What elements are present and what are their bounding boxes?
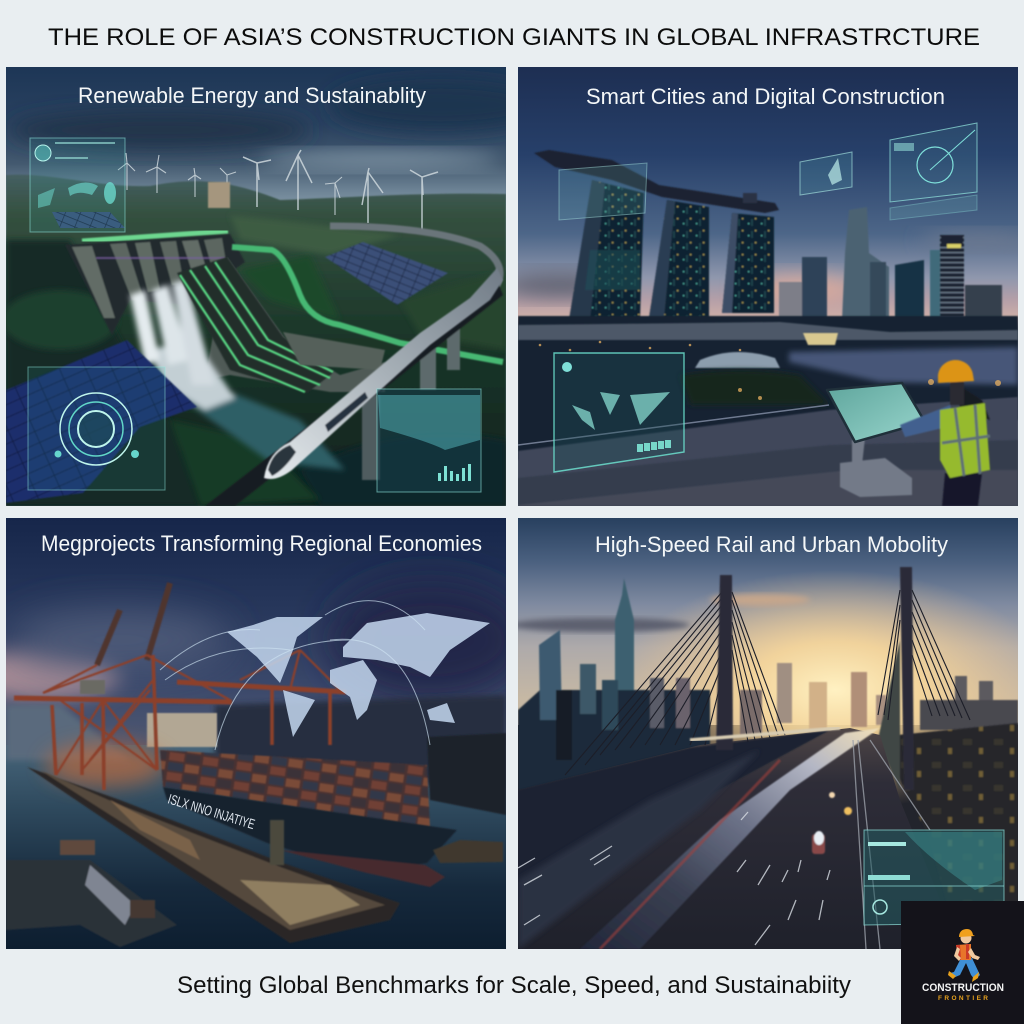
HUD: world map panel [554,353,684,472]
right yard [427,733,506,815]
dam green energy line [82,231,228,241]
heading: renewable energy: Renewable Energy and Sustainablity [78,83,426,108]
worker [900,360,990,506]
heading: megaprojects: Megprojects Transforming Regional Economies [41,531,482,556]
viaduct [205,226,503,506]
blurred train streak [580,728,880,949]
world map overlay [227,613,490,737]
heading: high-speed rail: High-Speed Rail and Urban Mobolity [595,532,948,557]
water base [6,745,506,949]
heading: smart cities: Smart Cities and Digital Construction [586,84,945,109]
control building [208,182,230,208]
upper solar array [325,242,448,305]
lane dashes [518,740,930,949]
logo wordmark: CONSTRUCTION [922,982,1004,994]
central hazy skyline [740,663,1018,735]
HUD: top right lower strip [890,195,977,220]
left skyline [518,578,710,790]
crane glow [45,743,165,787]
panel: high-speed rail and urban mobility [510,518,1024,949]
panel: renewable energy and sustainability [2,67,550,506]
HUD: traffic dashboard [864,830,1004,925]
title: THE ROLE OF ASIA’S CONSTRUCTION GIANTS IN GLOBAL INFRASTRCTURE [48,24,980,51]
ship hull [163,787,457,887]
Marina Bay towers [534,150,779,320]
left motion streaks [518,730,830,900]
city ground [518,316,1018,460]
logo sub-wordmark: FRONTIER [938,995,988,1002]
right bridge structure [878,723,1018,949]
logo: Construction Frontier [901,901,1024,1024]
panel: megaprojects transforming regional economies [0,518,530,949]
distant skyline [779,207,1002,323]
hull lettering: ISLX NNO INJATIYE [166,791,257,832]
wind turbines [118,150,438,230]
rooftop parapet and deck [518,396,1018,478]
HUD: lower left radar [28,367,165,490]
tablet stand [840,438,912,497]
bridge cables [565,590,970,775]
boat right [433,840,503,863]
dock [27,767,400,943]
road surface [518,728,960,949]
footer tagline: Setting Global Benchmarks for Scale, Speed, and Sustainabiity [177,972,851,999]
car with lights [812,792,852,854]
HUD: holo map [800,152,852,195]
lower solar array [6,340,197,503]
skypark [534,150,779,213]
HUD: top left [30,138,125,232]
hills and terrain [6,175,506,506]
cruise ship behind [147,713,217,747]
cranes [14,583,346,790]
HUD: top right radar [890,123,977,202]
bridge pylons [716,567,914,790]
waterfall [130,280,345,470]
panel: smart cities and digital construction [500,67,1024,506]
barge lower left [6,840,177,947]
icon: walking construction worker [948,929,980,982]
trade route arcs [160,601,430,750]
HUD: tower overlay [559,163,647,220]
HUD bar chart [438,464,471,481]
HUD: lower right dashboard [377,389,481,492]
high-speed train [264,268,503,479]
spillway with green lines [177,257,333,393]
container stacks [160,750,430,828]
dam [65,234,385,392]
green power conduit [232,247,503,362]
harbor city band [6,705,130,760]
retaining wall [283,332,385,370]
tablet [827,383,925,442]
crane machinery [80,680,105,694]
